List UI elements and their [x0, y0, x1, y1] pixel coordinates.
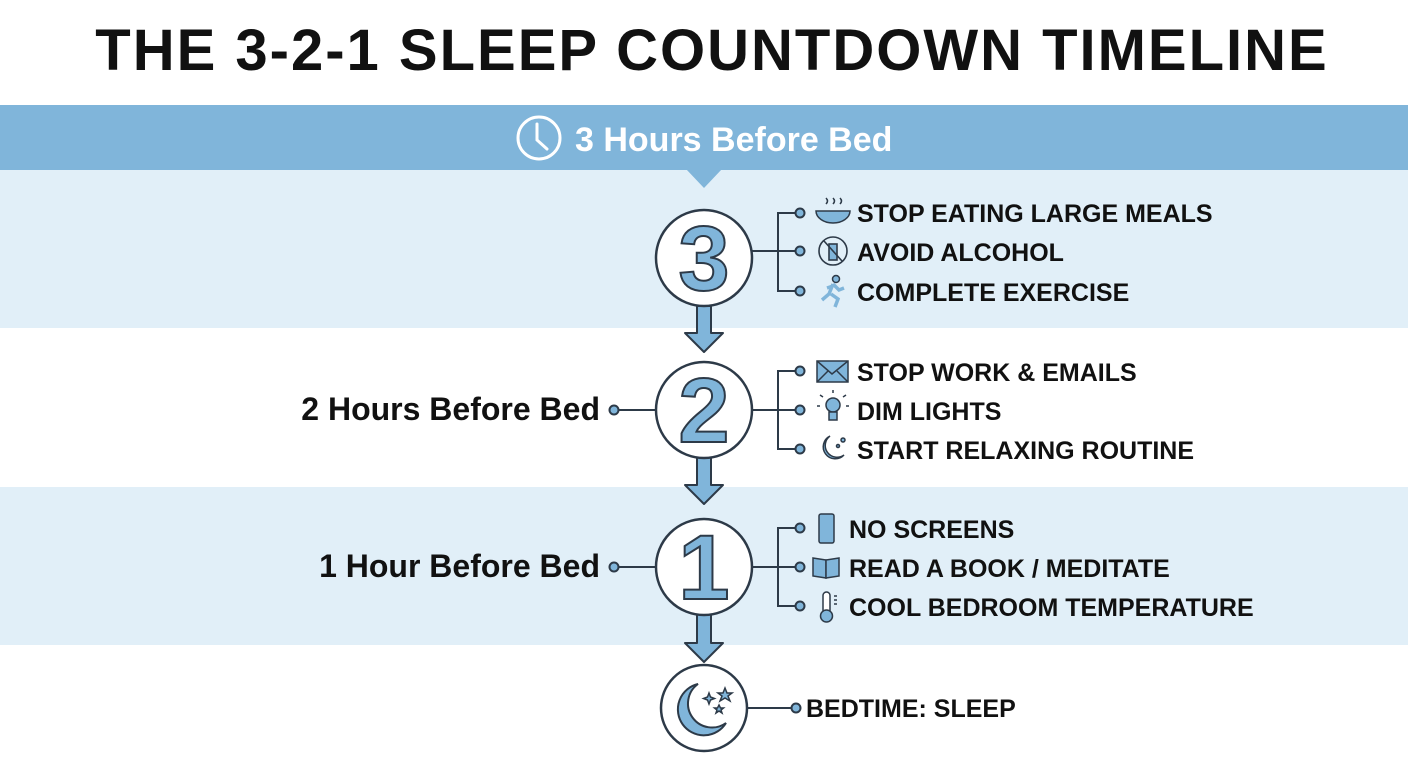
step 2 — [301, 359, 1194, 465]
step 2: 2 — [678, 360, 730, 462]
step 1: READ A BOOK / MEDITATE — [849, 555, 1170, 583]
icon: clock — [518, 117, 560, 159]
header band: 3 hours before bed: 3 Hours Before Bed — [575, 121, 892, 159]
step 3: COMPLETE EXERCISE — [857, 279, 1129, 307]
icon: phone — [819, 514, 834, 543]
icon: bowl — [816, 198, 850, 223]
step 3: AVOID ALCOHOL — [857, 239, 1064, 267]
icon: light bulb — [817, 390, 849, 420]
icon: thermometer — [820, 592, 837, 622]
step 2: DIM LIGHTS — [857, 398, 1001, 426]
step 3: STOP EATING LARGE MEALS — [857, 200, 1213, 228]
header band: 3 hours before bed — [0, 105, 1408, 188]
title: THE 3-2-1 SLEEP COUNTDOWN TIMELINE — [95, 18, 1329, 83]
icon: moon and stars — [823, 436, 845, 459]
step 1: COOL BEDROOM TEMPERATURE — [849, 594, 1254, 622]
bedtime step — [661, 665, 1016, 751]
step 3: 3 — [678, 208, 730, 310]
bedtime step: BEDTIME: SLEEP — [806, 695, 1016, 723]
icon: envelope — [817, 361, 848, 382]
step 2: 2 Hours Before Bed — [301, 391, 600, 427]
step 3 — [656, 198, 1213, 310]
band: 3 hours background — [0, 170, 1408, 328]
icon: book — [813, 558, 839, 578]
arrows between steps — [685, 306, 723, 662]
step 2: START RELAXING ROUTINE — [857, 437, 1194, 465]
icon: no alcohol — [819, 237, 847, 265]
step 1: 1 Hour Before Bed — [319, 548, 600, 584]
step 1 — [319, 514, 1254, 622]
step 1: 1 — [678, 517, 730, 619]
step 1: NO SCREENS — [849, 516, 1014, 544]
icon: runner — [822, 276, 844, 307]
step 2: STOP WORK & EMAILS — [857, 359, 1137, 387]
band: 1 hour background — [0, 487, 1408, 645]
icon: large moon — [678, 684, 726, 735]
